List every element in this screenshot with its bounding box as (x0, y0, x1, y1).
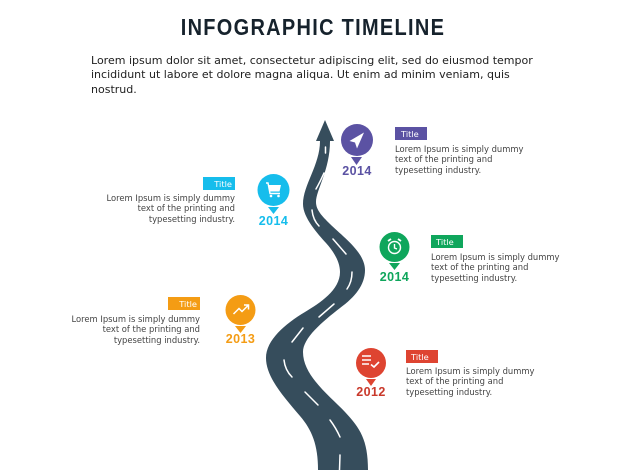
callout: orange text: text of the printing and (103, 324, 200, 334)
pin: 2014 blue: 2014 (259, 214, 288, 228)
callout: purple text (395, 144, 524, 175)
pin: 2014 purple (341, 124, 373, 178)
callout: green title (431, 235, 463, 248)
icon: shopping cart (266, 183, 281, 197)
callout: orange title: Title (179, 299, 197, 309)
callout: purple text: Lorem Ipsum is simply dummy (395, 144, 524, 154)
callout: purple text: typesetting industry. (395, 165, 481, 175)
callout: purple title: Title (401, 129, 419, 139)
callout: orange text (71, 314, 200, 345)
callout: green text: Lorem Ipsum is simply dummy (431, 252, 560, 262)
intro text: nostrud. (91, 83, 137, 96)
pin: 2012 red: 2012 (356, 385, 386, 399)
icon: trend line (234, 305, 248, 314)
pin: 2013 orange: 2013 (226, 332, 255, 346)
callout: purple text: text of the printing and (395, 154, 492, 164)
intro text: Lorem ipsum dolor sit amet, consectetur adipiscing elit, sed do eiusmod tempor (91, 54, 533, 67)
callout: green text: typesetting industry. (431, 273, 517, 283)
intro text: incididunt ut labore et dolore magna aliqua. Ut enim ad minim veniam, quis (91, 68, 510, 81)
callout: red title (406, 350, 438, 363)
callout: orange text: typesetting industry. (114, 335, 200, 345)
pin: 2013 orange (226, 295, 256, 346)
title: INFOGRAPHIC TIMELINE (181, 14, 445, 40)
pin: 2012 red (356, 348, 386, 399)
callout: red text: text of the printing and (406, 376, 503, 386)
callout: orange text: Lorem Ipsum is simply dummy (71, 314, 200, 324)
callout: orange title (168, 297, 200, 310)
callout: blue text (106, 192, 235, 224)
callout: blue title (203, 177, 235, 190)
icon: checklist (362, 356, 371, 364)
pin: 2014 green (380, 232, 410, 284)
callout: red text: Lorem Ipsum is simply dummy (406, 366, 535, 376)
icon: alarm clock (388, 239, 401, 254)
intro text (91, 54, 533, 96)
callout: red text: typesetting industry. (406, 387, 492, 397)
pin: 2014 purple: 2014 (342, 164, 372, 178)
pin: 2014 green: 2014 (380, 270, 409, 284)
callout: red text (406, 366, 535, 397)
callout: blue text: Lorem Ipsum is simply dummy (106, 192, 235, 202)
callout: green text: text of the printing and (431, 262, 528, 272)
road with arrowhead (266, 120, 368, 470)
callout: red title: Title (411, 352, 429, 362)
pin: 2014 blue (258, 174, 290, 228)
road centre dashes (284, 147, 352, 470)
callout: blue text: text of the printing and (138, 203, 235, 213)
callout: purple title (395, 127, 427, 140)
callout: green title: Title (436, 237, 454, 247)
callout: blue title: Title (214, 179, 232, 189)
callout: blue text: typesetting industry. (149, 214, 235, 224)
callout: green text (431, 252, 560, 283)
icon: navigation arrow (350, 132, 364, 148)
